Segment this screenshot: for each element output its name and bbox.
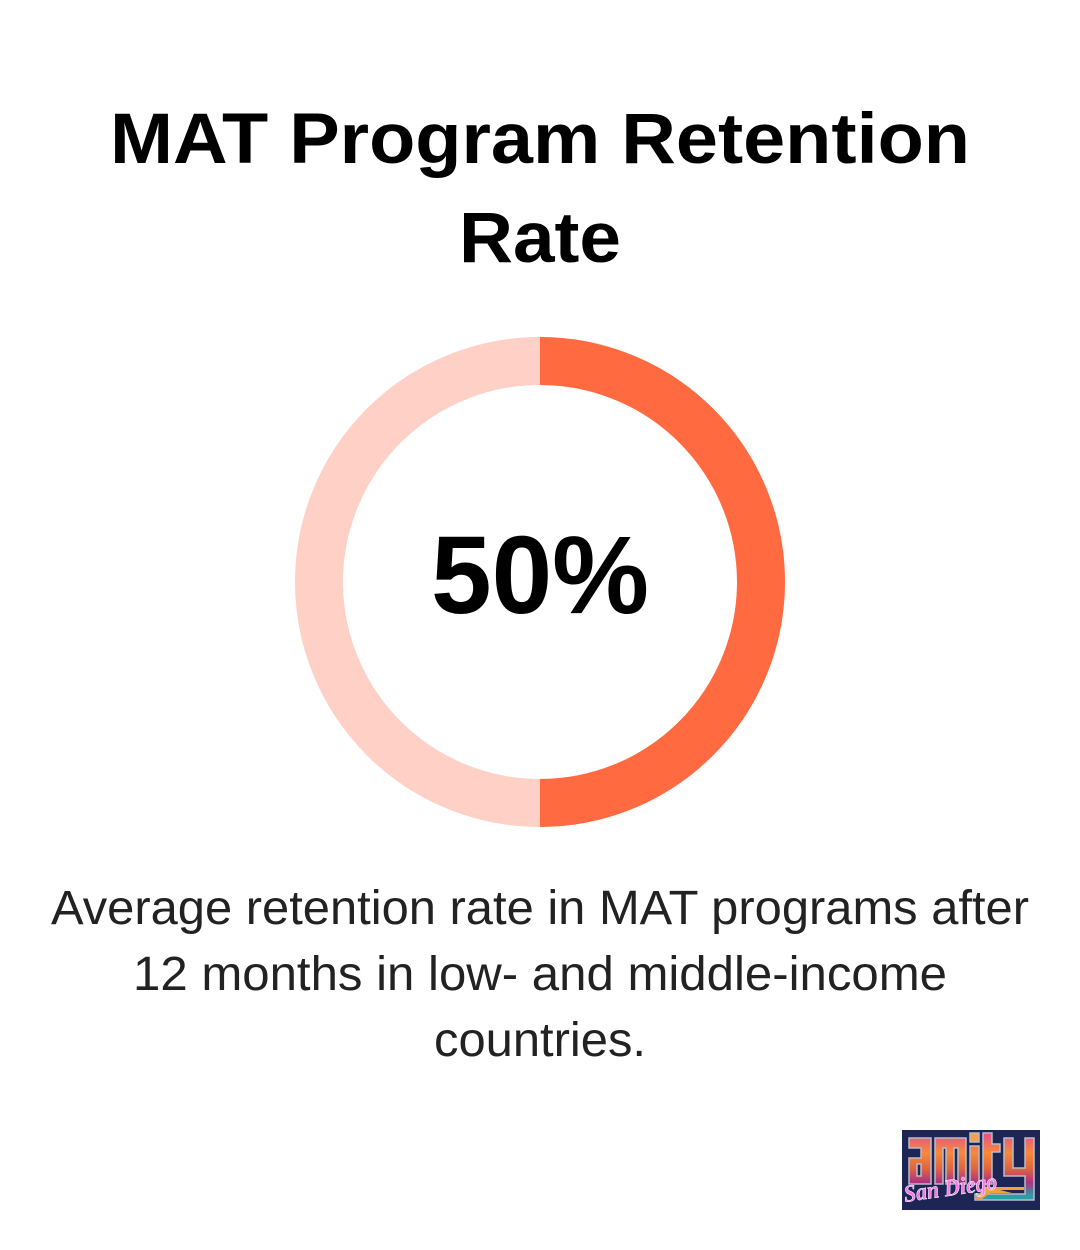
logo script text: San Diego <box>902 1169 999 1208</box>
title: MAT Program Retention <box>110 100 970 179</box>
donut center value: 50% <box>431 514 649 637</box>
description text: 12 months in low- and middle-income <box>133 948 947 1001</box>
logo letterforms <box>909 1133 1034 1200</box>
description text: Average retention rate in MAT programs after <box>51 882 1029 935</box>
donut chart: 50% retention <box>319 361 761 803</box>
description text: countries. <box>434 1014 646 1067</box>
description text <box>51 882 1029 1067</box>
title: Rate <box>459 199 621 278</box>
donut track <box>319 361 761 803</box>
logo beach stripes <box>975 1187 1024 1199</box>
logo: Amity San Diego <box>902 1130 1040 1210</box>
donut value arc <box>540 361 761 803</box>
title <box>110 100 970 278</box>
